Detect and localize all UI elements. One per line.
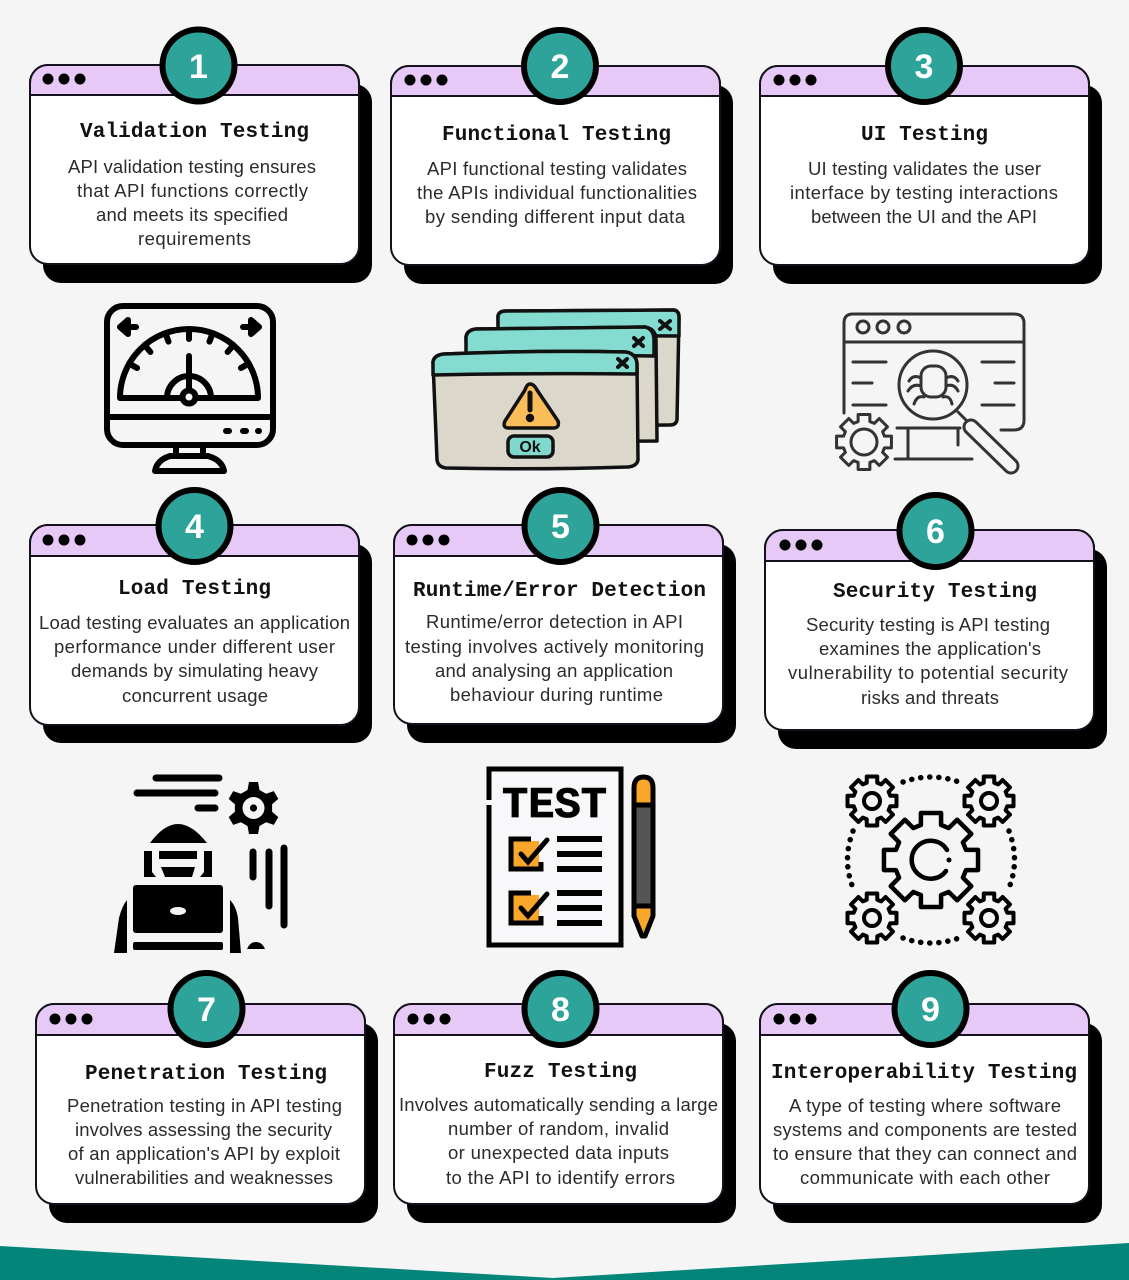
number badge 4 bbox=[158, 490, 230, 562]
text block: card 7 description: involves assessing the security bbox=[75, 1119, 333, 1140]
heading: Load Testing: Load Testing bbox=[118, 578, 271, 601]
text block: card 2 description: API functional testing validates bbox=[427, 158, 687, 179]
TEST heading on page: TEST bbox=[502, 781, 607, 831]
text block: card 5 description: Runtime/error detection in API bbox=[426, 611, 683, 632]
number badge 8: 8 bbox=[551, 991, 570, 1029]
text block: card 3 description bbox=[790, 158, 1058, 227]
number badge 5: 5 bbox=[551, 508, 570, 546]
text block: card 3 description: between the UI and the API bbox=[811, 206, 1037, 227]
panel: card 9 Interoperability Testing bbox=[760, 973, 1102, 1223]
text block: card 8 description: Involves automatically sending a large bbox=[399, 1094, 718, 1115]
text block: card 5 description: and analysing an application bbox=[435, 660, 673, 681]
panel: card 3 UI Testing bbox=[760, 30, 1102, 284]
small gear top right bbox=[964, 776, 1014, 826]
center gear bbox=[884, 813, 978, 907]
icon: monitor with gauge bbox=[107, 306, 273, 471]
text block: card 8 description bbox=[399, 1094, 718, 1188]
text block: card 7 description: Penetration testing in API testing bbox=[67, 1095, 342, 1116]
heading: Runtime/Error Detection: Runtime/Error Detection bbox=[413, 580, 706, 603]
text block: card 2 description: the APIs individual functionalities bbox=[417, 182, 697, 203]
text block: card 9 description: to ensure that they can connect and bbox=[773, 1143, 1077, 1164]
icon: test checklist and pencil bbox=[485, 769, 653, 945]
text block: card 3 description: interface by testing interactions bbox=[790, 182, 1058, 203]
checkbox 2 bbox=[511, 893, 547, 923]
panel: card 4 Load Testing bbox=[30, 490, 372, 743]
number badge 1: 1 bbox=[189, 48, 208, 86]
warning triangle bbox=[504, 384, 558, 428]
icon: bug search window bbox=[837, 314, 1024, 469]
heading: Penetration Testing: Penetration Testing bbox=[85, 1063, 327, 1086]
panel: card 8 Fuzz Testing bbox=[394, 973, 736, 1223]
number badge 1 bbox=[162, 30, 234, 102]
number badge 6 bbox=[900, 495, 972, 567]
text block: card 9 description bbox=[773, 1095, 1077, 1188]
OK button bbox=[508, 436, 553, 457]
number badge 9: 9 bbox=[921, 991, 940, 1029]
heading: Fuzz Testing: Fuzz Testing bbox=[484, 1061, 637, 1084]
panel: card 6 Security Testing bbox=[765, 495, 1107, 749]
text block: card 5 description: testing involves actively monitoring bbox=[405, 636, 704, 657]
text block: card 2 description: by sending different input data bbox=[425, 206, 686, 227]
text block: card 8 description: to the API to identify errors bbox=[446, 1167, 675, 1188]
text block: card 6 description: Security testing is API testing bbox=[806, 614, 1050, 635]
text block: card 1 description: that API functions correctly bbox=[77, 180, 309, 201]
text block: card 6 description: vulnerability to potential security bbox=[788, 662, 1069, 683]
number badge 8 bbox=[524, 973, 596, 1045]
number badge 7 bbox=[170, 973, 242, 1045]
text block: card 4 description: demands by simulating heavy bbox=[71, 660, 319, 681]
text block: card 4 description: performance under different user bbox=[54, 636, 335, 657]
heading: Validation Testing: Validation Testing bbox=[80, 121, 309, 144]
number badge 5 bbox=[524, 490, 596, 562]
OK button: Ok bbox=[519, 439, 541, 456]
text block: card 2 description bbox=[417, 158, 697, 227]
middle window bbox=[466, 327, 657, 442]
number badge 3: 3 bbox=[915, 48, 933, 86]
icon: connected gears bbox=[848, 776, 1014, 943]
text block: card 6 description bbox=[788, 614, 1069, 708]
panel: card 2 Functional Testing bbox=[391, 30, 733, 284]
text block: card 9 description: systems and components are tested bbox=[773, 1119, 1077, 1140]
footer band bbox=[0, 1243, 1129, 1280]
text block: card 5 description: behaviour during runtime bbox=[450, 684, 663, 705]
text block: card 4 description: Load testing evaluates an application bbox=[39, 612, 350, 633]
text block: card 9 description: A type of testing where software bbox=[789, 1095, 1061, 1116]
gear bbox=[837, 415, 891, 469]
text block: card 1 description: and meets its specified bbox=[96, 204, 288, 225]
heading: Functional Testing: Functional Testing bbox=[442, 124, 671, 147]
text block: card 5 description bbox=[405, 611, 704, 705]
text block: card 1 description: requirements bbox=[138, 228, 251, 249]
number badge 4: 4 bbox=[185, 508, 204, 546]
small gear bottom right bbox=[964, 894, 1014, 942]
number badge 6: 6 bbox=[926, 513, 945, 551]
text block: card 6 description: risks and threats bbox=[861, 687, 999, 708]
panel: card 5 Runtime/Error Detection bbox=[394, 490, 736, 743]
heading: Security Testing: Security Testing bbox=[833, 581, 1037, 604]
text block: card 6 description: examines the application's bbox=[819, 638, 1041, 659]
icon: hacker at laptop bbox=[114, 778, 284, 953]
icon: stacked alert windows bbox=[433, 310, 679, 469]
text block: card 8 description: number of random, invalid bbox=[448, 1118, 669, 1139]
pencil bbox=[634, 777, 653, 936]
number badge 9 bbox=[894, 973, 966, 1045]
panel: card 1 Validation Testing bbox=[30, 30, 372, 283]
text block: card 7 description: of an application's API by exploit bbox=[68, 1143, 340, 1164]
number badge 2 bbox=[524, 30, 596, 102]
heading: Interoperability Testing: Interoperability Testing bbox=[771, 1062, 1077, 1085]
text block: card 4 description bbox=[39, 612, 350, 706]
text block: card 8 description: or unexpected data inputs bbox=[448, 1142, 669, 1163]
checkbox 1 bbox=[511, 839, 547, 869]
number badge 3 bbox=[888, 30, 960, 102]
text block: card 1 description: API validation testing ensures bbox=[68, 156, 316, 177]
text block: card 7 description bbox=[67, 1095, 342, 1188]
heading: UI Testing: UI Testing bbox=[861, 124, 988, 147]
text block: card 7 description: vulnerabilities and weaknesses bbox=[75, 1167, 333, 1188]
number badge 2: 2 bbox=[551, 48, 569, 86]
number badge 7: 7 bbox=[197, 991, 216, 1029]
text block: card 4 description: concurrent usage bbox=[122, 685, 268, 706]
small gear bottom left bbox=[848, 894, 896, 942]
gear bbox=[229, 782, 278, 834]
text block: card 9 description: communicate with each other bbox=[800, 1167, 1050, 1188]
small gear top left bbox=[848, 776, 896, 826]
text block: card 3 description: UI testing validates the user bbox=[808, 158, 1041, 179]
front window bbox=[433, 351, 638, 469]
text block: card 1 description bbox=[68, 156, 316, 249]
panel: card 7 Penetration Testing bbox=[36, 973, 378, 1223]
back window bbox=[498, 310, 679, 426]
